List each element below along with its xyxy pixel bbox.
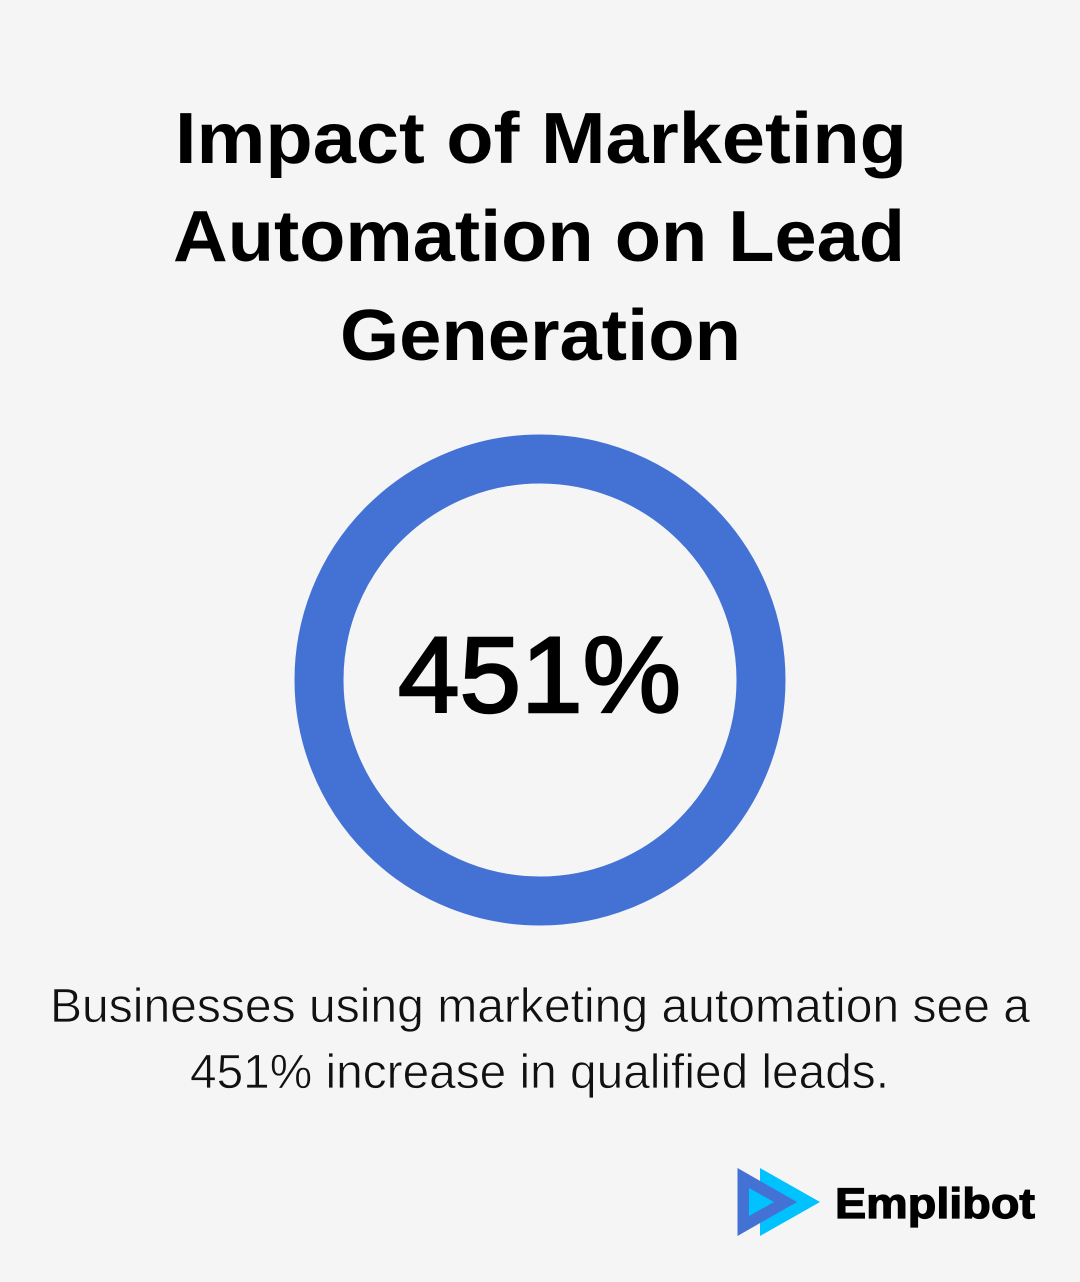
logo wordmark: Emplibot [835,1180,1035,1228]
logo: Emplibot [738,1168,1035,1236]
title [173,99,907,376]
donut chart: 451% [319,459,761,901]
description text: 451% increase in qualified leads. [190,1046,889,1099]
icon: play triangles [738,1168,820,1236]
title: Impact of Marketing [175,99,907,179]
description text: Businesses using marketing automation see a [50,980,1030,1033]
title: Generation [340,296,741,376]
description text [50,980,1030,1099]
title: Automation on Lead [173,197,905,277]
value: 451%: 451% [398,614,681,735]
